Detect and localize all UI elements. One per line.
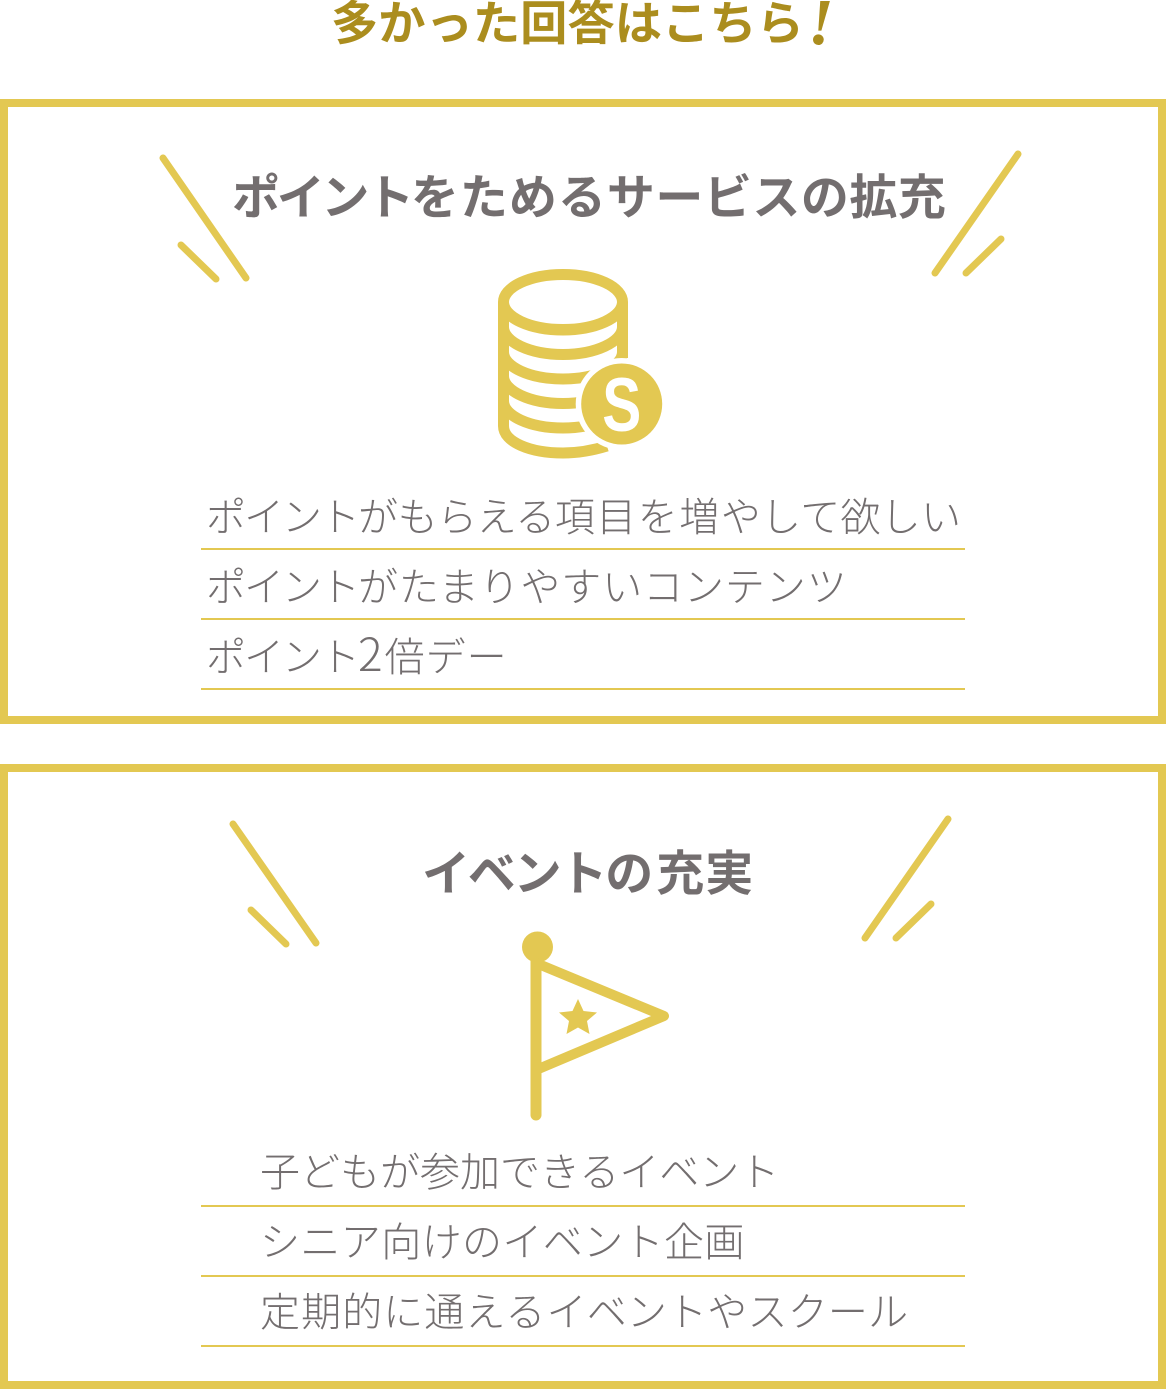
icon: coins: S — [602, 364, 641, 448]
accent lines: events — [230, 816, 952, 948]
list text 1: ポイントがもらえる項目を増やして欲しい — [206, 496, 961, 540]
list text 2: ポイントがたまりやすいコンテンツ — [206, 566, 848, 610]
heading: points: ポイントをためるサービスの拡充 — [232, 172, 946, 225]
list text 6: 定期的に通えるイベントやスクール — [260, 1291, 908, 1335]
heading: events: イベントの充実 — [422, 848, 754, 901]
accent lines: points — [160, 150, 1022, 282]
list text 3: ポイント2倍デー — [206, 619, 508, 685]
list text 5: シニア向けのイベント企画 — [260, 1221, 745, 1265]
icon: coins — [498, 269, 662, 458]
list text 4: 子どもが参加できるイベント — [260, 1151, 779, 1195]
panel: events — [0, 764, 1166, 1389]
icon: flag — [522, 932, 669, 1120]
panel: points — [0, 99, 1166, 724]
